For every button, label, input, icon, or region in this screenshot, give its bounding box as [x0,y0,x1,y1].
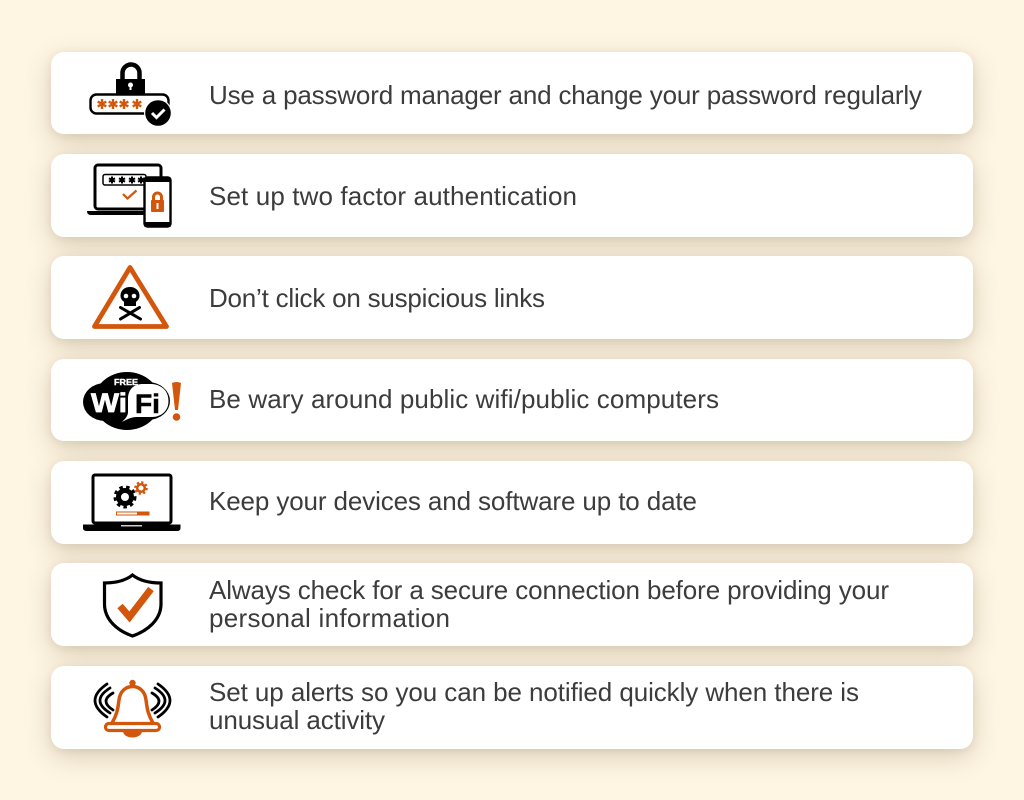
text: tip 7 [209,677,859,735]
icon: free wifi with exclamation mark: Wi [91,388,127,418]
icon: laptop and phone with lock [87,165,170,227]
icon: free wifi with exclamation mark: Fi [135,389,160,419]
icon: free wifi with exclamation mark [83,372,181,430]
panel: two factor authentication [51,154,973,237]
icon: laptop with gears and progress bar [83,475,180,531]
icon: ringing bell [95,680,170,738]
text: tip 7: unusual activity [209,705,385,735]
panel: alerts [51,666,973,749]
icon: padlock and password field [90,65,172,127]
icon: shield with check mark [104,575,161,636]
text: tip 3: Don’t click on suspicious links [209,283,545,313]
panel: public wifi [51,359,973,441]
icon: free wifi with exclamation mark: FREE [114,377,138,387]
text: tip 4: Be wary around public wifi/public computers [209,384,719,414]
text: tip 6: personal information [209,603,450,633]
panel: secure connection [51,563,973,646]
text: tip 6 [209,575,889,633]
text: tip 1: Use a password manager and change your password regularly [209,80,922,110]
text: tip 5: Keep your devices and software up to date [209,486,697,516]
panel: suspicious links [51,256,973,339]
panel: software updates [51,461,973,544]
icon: warning triangle with skull [94,268,166,326]
text: tip 7: Set up alerts so you can be notified quickly when there is [209,677,859,707]
text: tip 6: Always check for a secure connection before providing your [209,575,889,605]
panel: password manager [51,52,973,134]
text: tip 2: Set up two factor authentication [209,181,577,211]
